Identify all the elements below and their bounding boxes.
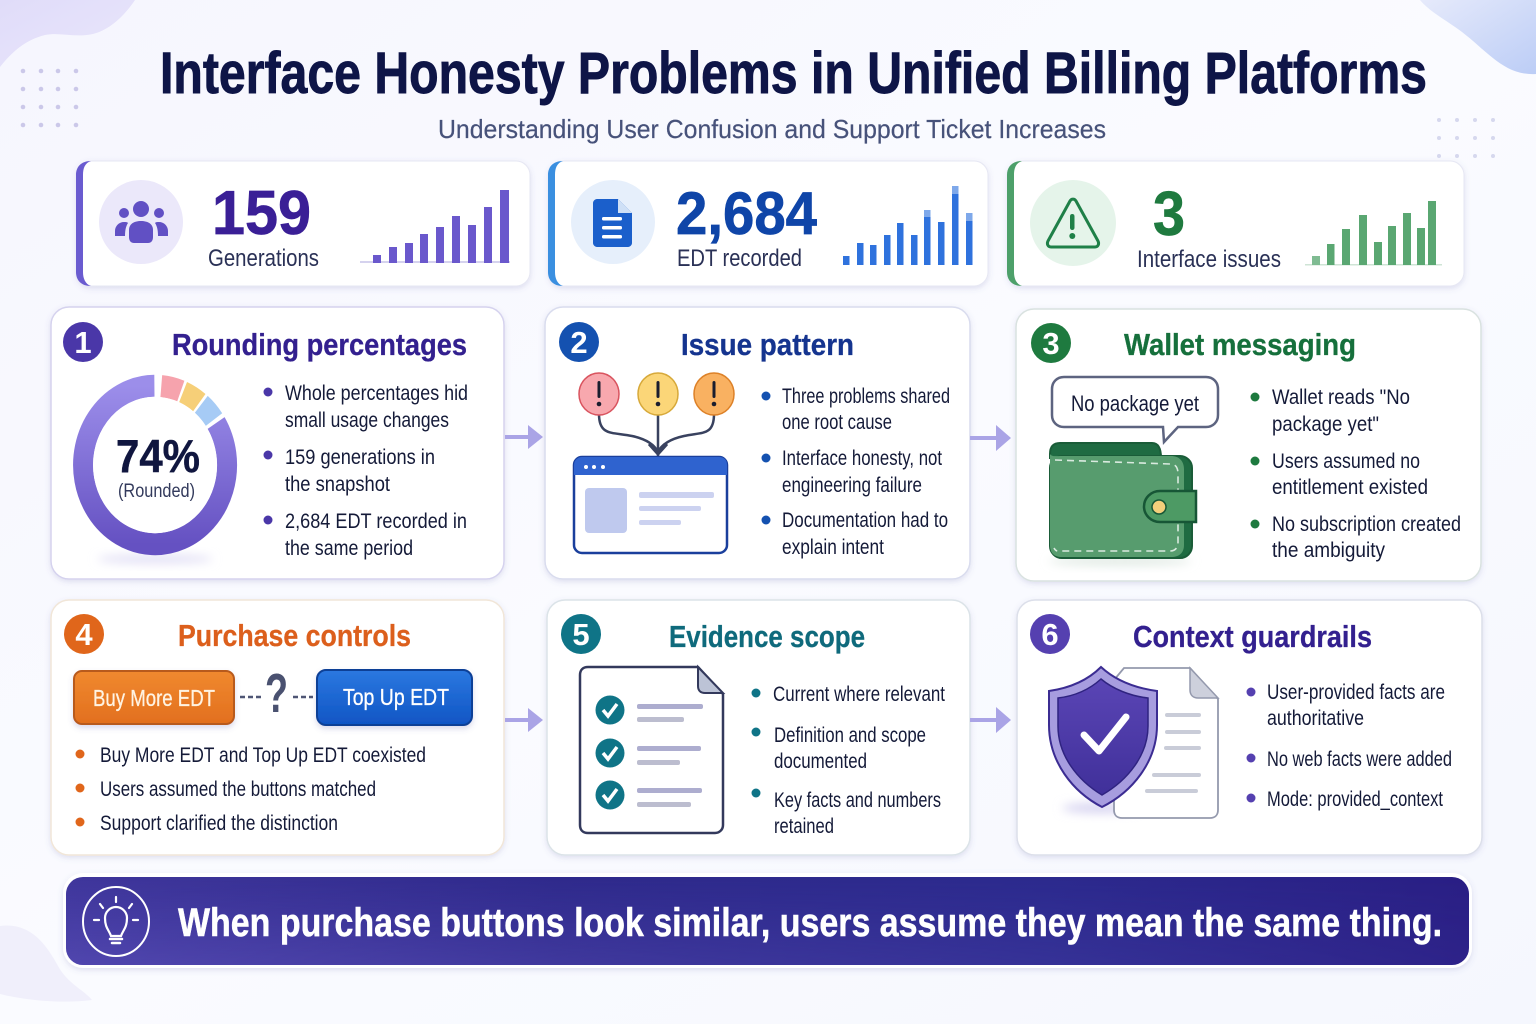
badge 2: [559, 322, 599, 362]
arrow 4 to 5: [505, 708, 543, 732]
bullets: documented: [774, 750, 867, 773]
bullets: Three problems shared: [782, 385, 950, 408]
heading: Issue pattern: [681, 327, 854, 362]
panel 5: evidence scope: [547, 600, 970, 855]
badge 4: 4: [75, 617, 93, 652]
bar chart: generations: [360, 190, 510, 263]
bullets: Support clarified the distinction: [100, 812, 338, 835]
icon: document: [571, 180, 655, 264]
heading: Rounding percentages: [172, 327, 467, 362]
heading: Wallet messaging: [1124, 327, 1356, 362]
decorative dot grid right: [1437, 118, 1495, 158]
badge 5: 5: [572, 617, 590, 652]
bullets: one root cause: [782, 411, 892, 434]
arrow 5 to 6: [970, 707, 1011, 733]
bullets: package yet": [1272, 413, 1379, 436]
question mark connector: [240, 662, 313, 724]
bullets: authoritative: [1267, 707, 1364, 730]
heading: Purchase controls: [178, 618, 411, 653]
badge 4: [64, 614, 104, 654]
bullets: the ambiguity: [1272, 539, 1385, 562]
icon: wallet: [1048, 443, 1196, 565]
bullets: 159 generations in: [285, 446, 435, 469]
bullets: entitlement existed: [1272, 476, 1428, 499]
button: top up EDT: Top Up EDT: [343, 684, 449, 710]
button: buy more EDT: Buy More EDT: [93, 685, 215, 711]
arrow 2 to 3: [970, 425, 1011, 451]
bullets: explain intent: [782, 536, 884, 559]
stat value: 159: [212, 179, 311, 248]
icon: shield and document: [1049, 667, 1218, 818]
stat card: interface issues: [1007, 161, 1464, 286]
bullets: User-provided facts are: [1267, 681, 1445, 704]
bullets: No subscription created: [1272, 513, 1461, 536]
badge 5: [561, 614, 601, 654]
bullets: Whole percentages hid: [285, 382, 468, 405]
bullets: the same period: [285, 537, 413, 560]
button: top up EDT: [317, 670, 472, 725]
badge 1: 1: [74, 325, 92, 360]
bullets: No web facts were added: [1267, 748, 1452, 771]
decorative dot grid left: [21, 69, 78, 127]
icon: warning triangle: [1030, 180, 1116, 266]
stat label: EDT recorded: [677, 245, 802, 272]
bullets: [264, 382, 468, 560]
illustration: alerts converge to window: [574, 373, 734, 553]
bullets: small usage changes: [285, 409, 449, 432]
bullets: Definition and scope: [774, 724, 926, 747]
speech bubble: No package yet: [1071, 391, 1199, 416]
donut value: 74%: [116, 430, 200, 482]
badge 3: 3: [1042, 326, 1060, 361]
badge 2: 2: [570, 325, 588, 360]
bullets: Users assumed no: [1272, 450, 1420, 473]
panel 2: issue pattern: [545, 307, 970, 579]
bullets: Key facts and numbers: [774, 789, 941, 812]
bullets: [752, 683, 945, 838]
bar chart: EDT: [843, 186, 972, 265]
stat label: Generations: [208, 245, 319, 272]
bullets: engineering failure: [782, 474, 922, 497]
question mark connector: ?: [265, 662, 288, 724]
heading: Evidence scope: [669, 619, 865, 654]
badge 6: [1030, 614, 1070, 654]
donut chart 74%: [83, 386, 227, 563]
bullets: [1250, 386, 1461, 562]
badge 1: [63, 322, 103, 362]
bullets: Buy More EDT and Top Up EDT coexisted: [100, 744, 426, 767]
bullets: Documentation had to: [782, 509, 948, 532]
arrow 1 to 2: [505, 425, 543, 449]
subtitle: Understanding User Confusion and Support Ticket Increases: [438, 114, 1106, 144]
panel 6: context guardrails: [1017, 600, 1482, 855]
stat card: generations: [76, 161, 530, 286]
speech bubble: [1052, 377, 1218, 442]
bullets: Current where relevant: [773, 683, 945, 706]
stat label: Interface issues: [1137, 246, 1281, 273]
icon: lightbulb: [83, 887, 149, 956]
heading: Context guardrails: [1133, 619, 1372, 654]
bar chart: issues: [1305, 201, 1442, 266]
bullets: the snapshot: [285, 473, 390, 496]
bullets: [76, 744, 426, 835]
stat card: EDT recorded: [548, 161, 988, 286]
donut caption: (Rounded): [118, 481, 195, 502]
badge 6: 6: [1041, 617, 1059, 652]
icon: checklist document: [580, 667, 723, 833]
bullets: [1246, 681, 1452, 811]
bullets: Interface honesty, not: [782, 447, 942, 470]
bullets: [762, 385, 950, 559]
panel 1: rounding percentages: [51, 307, 504, 579]
bullets: retained: [774, 815, 834, 838]
panel 3: wallet messaging: [1016, 309, 1481, 581]
button: buy more EDT: [74, 671, 234, 724]
bullets: Wallet reads "No: [1272, 386, 1410, 409]
stat value: 2,684: [676, 180, 818, 247]
icon: people: [99, 180, 183, 264]
bullets: 2,684 EDT recorded in: [285, 510, 467, 533]
badge 3: [1031, 323, 1071, 363]
panel 4: purchase controls: [51, 600, 504, 855]
bullets: Mode: provided_context: [1267, 788, 1443, 811]
stat value: 3: [1153, 180, 1185, 249]
takeaway banner: [63, 873, 1472, 968]
bullets: Users assumed the buttons matched: [100, 778, 376, 801]
